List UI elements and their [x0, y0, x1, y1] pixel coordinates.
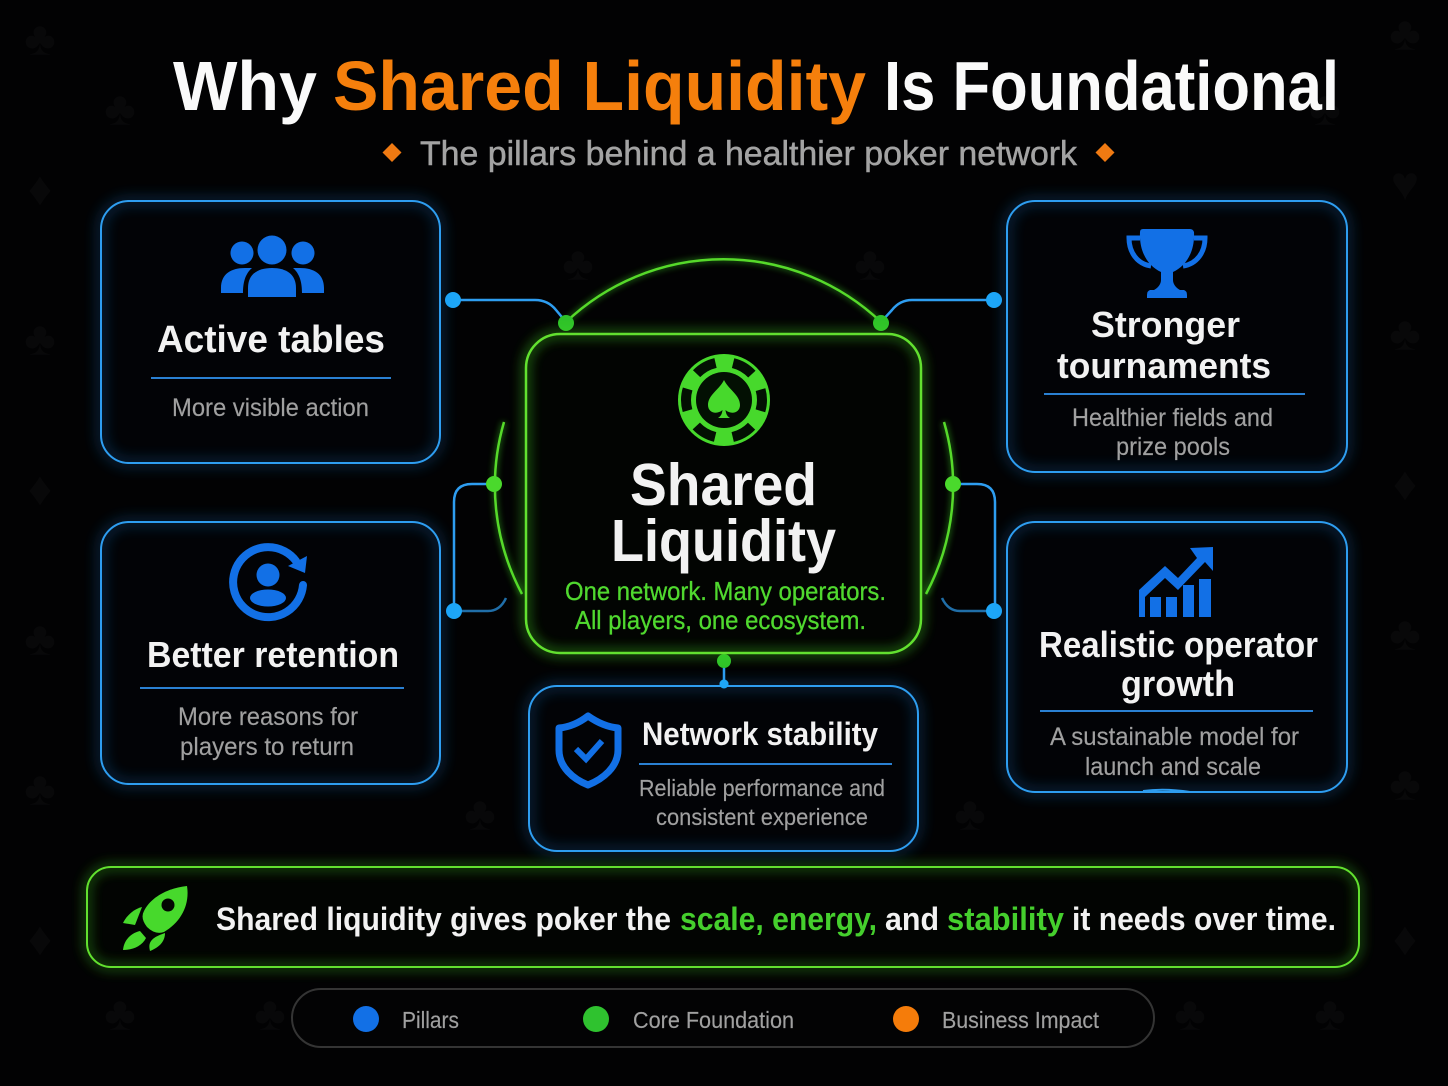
panel: stronger tournaments	[1007, 201, 1347, 472]
description	[1072, 404, 1273, 461]
tagline: One network. Many operators.	[565, 576, 886, 606]
text: ♣	[24, 13, 56, 66]
subtitle: The pillars behind a healthier poker network	[420, 135, 1078, 173]
text: ♦	[28, 913, 52, 966]
title	[173, 47, 1339, 125]
message: scale, energy,	[680, 901, 877, 937]
description: launch and scale	[1085, 753, 1261, 781]
message: and	[885, 901, 939, 937]
description: More visible action	[172, 394, 369, 422]
description: prize pools	[1116, 433, 1230, 461]
banner: takeaway	[87, 867, 1359, 967]
heading: Active tables	[157, 319, 385, 361]
description: Healthier fields and	[1072, 404, 1273, 432]
legend item: business impact	[893, 1006, 1100, 1033]
icon: poker chip	[678, 354, 770, 446]
heading: shared liquidity	[611, 452, 836, 574]
description: A sustainable model for	[1050, 723, 1299, 751]
icon: people	[221, 236, 324, 297]
description	[1050, 723, 1299, 781]
text: ♦	[1393, 458, 1417, 511]
title: Shared Liquidity	[333, 47, 866, 125]
heading	[1057, 304, 1271, 386]
text: ♣	[464, 788, 496, 841]
description	[178, 703, 358, 761]
heading: growth	[1121, 663, 1235, 704]
text: ♣	[562, 238, 594, 291]
heading: Stronger	[1091, 304, 1240, 345]
legend	[292, 989, 1154, 1047]
icon: growth chart	[1139, 547, 1213, 617]
heading	[1039, 624, 1318, 704]
description: Reliable performance and	[639, 775, 885, 801]
text: ♣	[254, 988, 286, 1041]
description: consistent experience	[656, 804, 868, 830]
icon: shield	[559, 716, 618, 785]
heading: Better retention	[147, 634, 399, 675]
legend item: pillars	[353, 1006, 459, 1033]
heading: tournaments	[1057, 345, 1271, 386]
heading: Realistic operator	[1039, 624, 1318, 665]
text: ♣	[1174, 988, 1206, 1041]
message	[216, 901, 1336, 937]
text: ♣	[104, 988, 136, 1041]
message: it needs over time.	[1072, 901, 1336, 937]
icon: returning player	[233, 547, 307, 617]
text: ♣	[24, 763, 56, 816]
text: ♣	[1314, 988, 1346, 1041]
text: ♦	[28, 163, 52, 216]
text: ♣	[24, 313, 56, 366]
text: ♣	[1389, 608, 1421, 661]
title: Is Foundational	[884, 47, 1339, 125]
description	[639, 775, 885, 830]
title: Why	[173, 47, 317, 125]
text: ♦	[28, 463, 52, 516]
heading: shared liquidity: Shared	[630, 452, 817, 518]
icon: rocket	[123, 886, 188, 951]
description: players to return	[180, 733, 354, 761]
text: ♣	[954, 788, 986, 841]
heading: Network stability	[642, 716, 878, 752]
text: ♥	[1391, 158, 1419, 211]
panel: network stability	[529, 680, 918, 851]
legend item: business impact: Business Impact	[942, 1007, 1100, 1033]
panel: core shared liquidity	[526, 334, 921, 653]
message: Shared liquidity gives poker the	[216, 901, 671, 937]
text: ♣	[24, 613, 56, 666]
icon: trophy	[1129, 229, 1205, 298]
text: ♣	[1309, 83, 1341, 136]
description: More reasons for	[178, 703, 358, 731]
text: ♣	[1389, 8, 1421, 61]
panel: realistic operator growth	[1007, 522, 1347, 792]
legend item: core foundation: Core Foundation	[633, 1007, 794, 1033]
text: ♣	[1389, 308, 1421, 361]
connector lines	[445, 259, 1002, 688]
text: ♣	[854, 238, 886, 291]
tagline	[565, 576, 886, 635]
text: ♦	[1393, 913, 1417, 966]
panel: better retention	[101, 522, 440, 784]
legend item: pillars: Pillars	[402, 1007, 459, 1033]
heading: shared liquidity: Liquidity	[611, 508, 836, 574]
panel: active tables	[101, 201, 440, 463]
message: stability	[947, 901, 1064, 937]
tagline: All players, one ecosystem.	[575, 605, 866, 635]
text: ♣	[1389, 758, 1421, 811]
text: ♣	[104, 83, 136, 136]
